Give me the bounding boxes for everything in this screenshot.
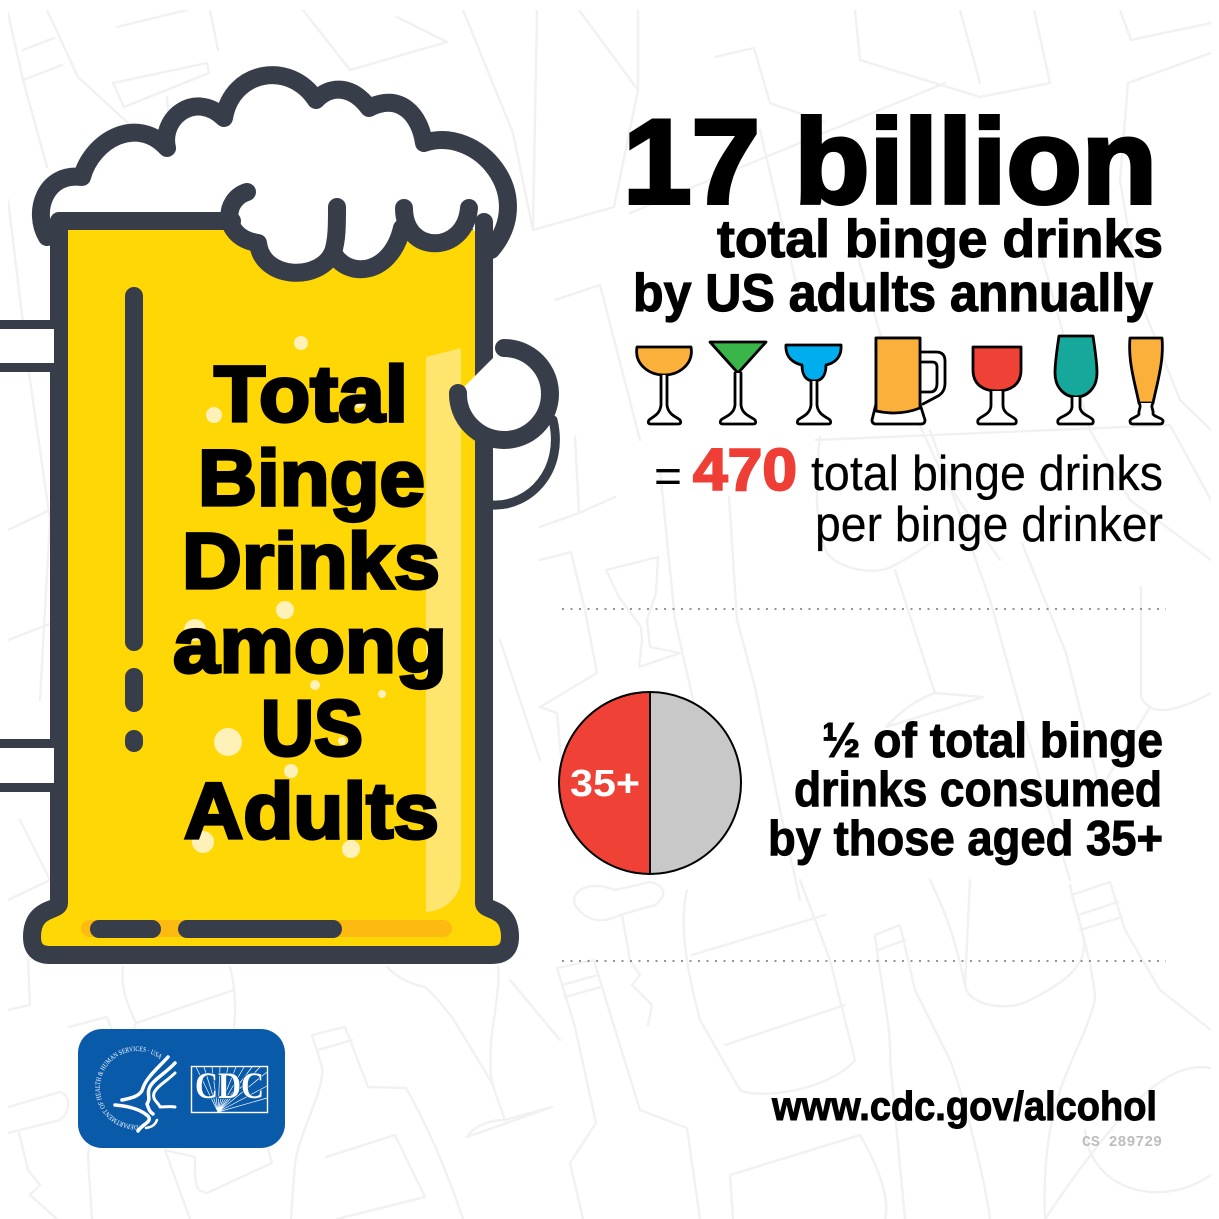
CDC wordmark box: CDC xyxy=(195,1066,264,1107)
icon: martini glass xyxy=(710,342,766,424)
drink icons row xyxy=(637,336,1163,424)
beer mug illustration xyxy=(0,75,555,955)
title on mug: US xyxy=(261,683,363,772)
white window in handle bars xyxy=(50,329,54,783)
title on mug: Drinks xyxy=(182,516,440,605)
HHS seal ring text: DEPARTMENT OF HEALTH & HUMAN SERVICES · USA xyxy=(95,1046,162,1130)
pie chart: 35+ xyxy=(559,692,741,874)
icon: beer mug xyxy=(872,338,945,424)
base dark bars xyxy=(90,920,342,938)
title on mug: Binge xyxy=(198,433,425,522)
470 per drinker statistic: 470 xyxy=(693,437,797,503)
handle ring xyxy=(458,347,550,440)
headline: 17 billion: 17 billion xyxy=(623,95,1157,229)
subheading: by US adults annually xyxy=(633,264,1153,323)
470 per drinker statistic: total binge drinks xyxy=(811,447,1163,501)
icon: pilsner glass xyxy=(1130,338,1163,424)
half of drinks by 35+ text: drinks consumed xyxy=(794,763,1162,817)
mug body xyxy=(32,221,510,955)
half of drinks by 35+ text xyxy=(768,714,1163,866)
title on mug xyxy=(173,349,447,855)
HHS eagle xyxy=(115,1057,175,1131)
subheading: total binge drinks xyxy=(717,210,1163,269)
title on mug: Total xyxy=(214,349,408,438)
mug left handle bars xyxy=(0,320,55,792)
beer bubbles xyxy=(184,336,386,858)
title on mug: Adults xyxy=(184,766,439,855)
subheading xyxy=(633,210,1163,323)
base shadow strip xyxy=(81,920,452,937)
470 per drinker statistic: = xyxy=(654,450,682,502)
mug right back handle xyxy=(492,420,555,505)
icon: wine goblet xyxy=(973,347,1021,424)
foam fill xyxy=(41,75,508,272)
glass reflection line xyxy=(125,287,143,752)
half of drinks by 35+ text: by those aged 35+ xyxy=(768,812,1163,866)
470 per drinker statistic xyxy=(654,437,1163,552)
470 per drinker statistic: per binge drinker xyxy=(815,498,1163,552)
icon: margarita glass xyxy=(786,345,841,424)
half of drinks by 35+ text: ½ of total binge xyxy=(822,714,1163,768)
pie chart: 35+: 35+ xyxy=(570,763,640,805)
glass highlight xyxy=(426,348,461,912)
icon: tulip glass xyxy=(1055,336,1097,424)
icon: coupe glass xyxy=(637,347,691,424)
CDC HHS logo xyxy=(78,1029,285,1148)
publication code: CS 289729 xyxy=(1082,1134,1162,1151)
title on mug: among xyxy=(173,600,447,689)
foam outline xyxy=(41,75,508,273)
website URL: www.cdc.gov/alcohol xyxy=(771,1083,1157,1129)
